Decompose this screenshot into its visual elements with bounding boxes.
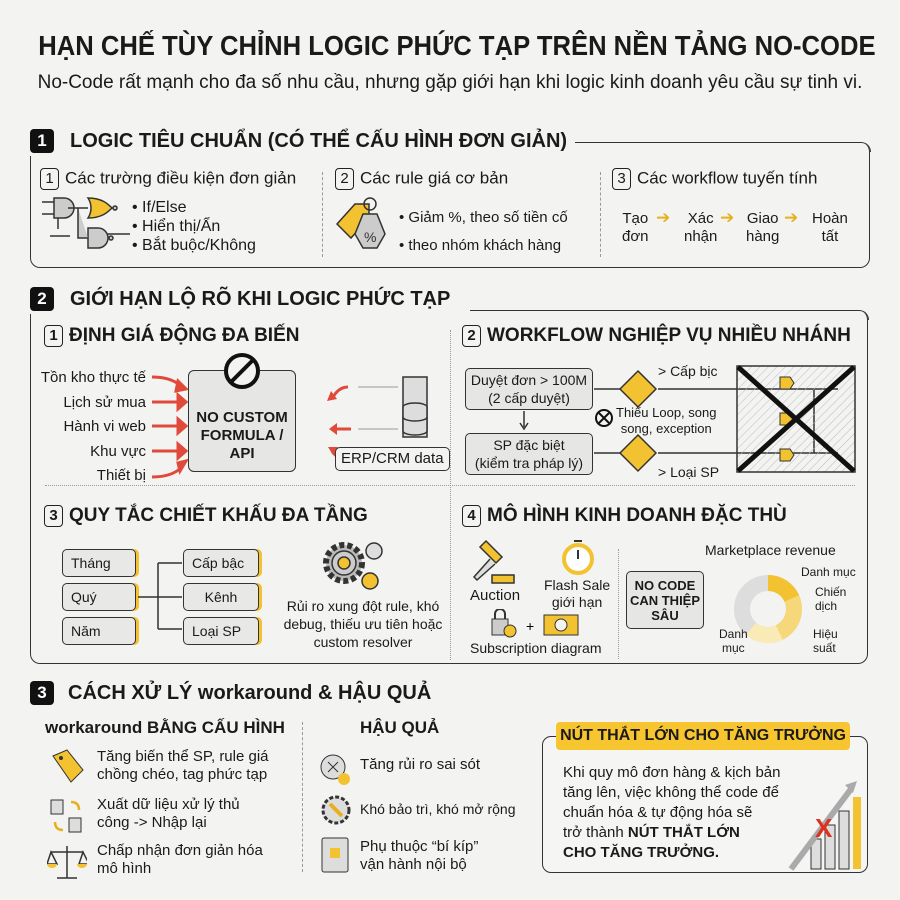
item 3: linear workflows: Xác bbox=[688, 210, 714, 227]
sub-panel: special business models: MÔ HÌNH KINH DOANH ĐẶC THÙ bbox=[487, 505, 787, 526]
item 3: linear workflows: nhận bbox=[684, 228, 717, 245]
sub-panel: special business models: Subscription diagram bbox=[470, 640, 602, 656]
item 3: linear workflows: đơn bbox=[622, 228, 649, 245]
item 1: simple conditions: 1 bbox=[45, 170, 54, 187]
item 2: basic price rules: • Giảm %, theo số tiền cố bbox=[399, 209, 568, 226]
title: HẠN CHẾ TÙY CHỈNH LOGIC PHỨC TẠP TRÊN NỀN TẢNG NO-CODE bbox=[38, 30, 876, 61]
chart: marketplace revenue donut: Marketplace revenue bbox=[705, 542, 836, 558]
icon: price tags: % bbox=[364, 229, 376, 245]
icon: book bbox=[322, 838, 348, 872]
sub-panel: dynamic pricing: Lịch sử mua bbox=[63, 394, 146, 410]
sub-panel: multi-tier discount: Rủi ro xung đột rule, khó debug, thiếu ưu tiên hoặc custom resolver bbox=[284, 598, 442, 650]
callout: growth bottleneck: tăng lên, việc không thể code để bbox=[563, 784, 779, 801]
sub-panel: multi-branch workflow: > Cấp bịc bbox=[658, 363, 718, 379]
column: consequences: vận hành nội bộ bbox=[360, 856, 467, 873]
icon: lock + money bbox=[492, 609, 578, 638]
chart: marketplace revenue donut: Chiến bbox=[815, 585, 846, 599]
chart: marketplace revenue donut: mục bbox=[722, 641, 745, 655]
column: consequences bbox=[320, 718, 515, 873]
subtitle: No-Code rất mạnh cho đa số nhu cầu, nhưng gặp giới hạn khi logic kinh doanh yêu cầu sự tinh vi. bbox=[38, 72, 862, 93]
sub-panel: multi-tier discount: QUY TẮC CHIẾT KHẤU ĐA TẦNG bbox=[69, 505, 368, 526]
column: workaround: mô hình bbox=[97, 860, 151, 877]
sub-panel: dynamic pricing: Khu vực bbox=[90, 442, 146, 460]
item 3: linear workflows: ➔ bbox=[656, 208, 670, 227]
sub-panel: multi-branch workflow: WORKFLOW NGHIỆP VỤ NHIỀU NHÁNH bbox=[487, 325, 851, 346]
icon: gear wrench bbox=[322, 796, 350, 824]
panel: section 2 bbox=[30, 310, 868, 664]
box: no code deep bbox=[626, 571, 704, 629]
column: workaround: workaround BẰNG CẤU HÌNH bbox=[45, 718, 285, 737]
column: consequences: Khó bảo trì, khó mở rộng bbox=[360, 801, 515, 817]
heading: section 3: CÁCH XỬ LÝ workaround & HẬU QUẢ bbox=[68, 682, 431, 704]
column: workaround: Tăng biến thể SP, rule giá bbox=[97, 748, 269, 765]
item 3: linear workflows: tất bbox=[822, 228, 838, 245]
sub-panel: multi-tier discount: 3 bbox=[49, 507, 58, 524]
callout label bbox=[556, 722, 850, 750]
sub-panel: multi-branch workflow bbox=[462, 324, 856, 480]
item 1: simple conditions: Các trường điều kiện đơn giản bbox=[65, 168, 296, 187]
column: consequences: Tăng rủi ro sai sót bbox=[360, 756, 480, 773]
sub-panel: dynamic pricing: 1 bbox=[49, 327, 58, 344]
sub-panel: special business models: giới hạn bbox=[552, 594, 602, 610]
icon: error bbox=[320, 754, 350, 785]
sub-panel: multi-branch workflow: 2 bbox=[467, 327, 476, 344]
item 3: linear workflows: hàng bbox=[746, 228, 779, 245]
sub-panel: special business models: Flash Sale bbox=[544, 577, 610, 593]
sub-panel: dynamic pricing bbox=[41, 323, 450, 484]
sub-panel: multi-branch workflow: > Loại SP bbox=[658, 464, 719, 480]
item 3: linear workflows: Hoàn bbox=[812, 210, 848, 227]
column: workaround: công -> Nhập lại bbox=[97, 814, 207, 831]
item 3: linear workflows: Các workflow tuyến tính bbox=[637, 168, 817, 187]
sub-panel: special business models: 4 bbox=[467, 507, 476, 524]
item 1: simple conditions bbox=[40, 168, 296, 254]
item 3: linear workflows: ➔ bbox=[720, 208, 734, 227]
sub-panel: multi-branch workflow: (kiểm tra pháp lý) bbox=[475, 455, 583, 471]
column: consequences: HẬU QUẢ bbox=[360, 718, 439, 737]
icon: stopwatch bbox=[562, 540, 594, 575]
box: no custom formula bbox=[188, 370, 296, 472]
icon: hands exchange bbox=[50, 800, 82, 832]
chart: marketplace revenue donut: Danh mục bbox=[801, 565, 856, 579]
sub-panel: special business models bbox=[462, 503, 856, 659]
icon: prohibited bbox=[224, 353, 260, 389]
sub-panel: multi-branch workflow: Duyệt đơn > 100M bbox=[471, 372, 587, 388]
sub-panel: multi-branch workflow: song, exception bbox=[621, 421, 712, 436]
box: no code deep: NO CODE CAN THIỆP SÂU bbox=[630, 578, 700, 623]
panel: section 1 bbox=[30, 142, 870, 268]
item 2: basic price rules bbox=[335, 168, 568, 254]
sub-panel: multi-tier discount: Loại SP bbox=[192, 623, 241, 639]
chart: growth bars with X bbox=[788, 781, 861, 871]
item 1: simple conditions: • If/Else bbox=[132, 199, 187, 216]
sub-panel: multi-tier discount: Năm bbox=[71, 623, 101, 639]
label: ERP/CRM data: ERP/CRM data bbox=[341, 450, 444, 467]
item 1: simple conditions: • Hiển thị/Ẩn bbox=[132, 218, 220, 235]
icon: crossed out block bbox=[736, 365, 856, 473]
arrows in bbox=[152, 376, 188, 478]
icon: database bbox=[327, 376, 428, 457]
heading: section 1: 1 bbox=[37, 131, 47, 150]
callout: growth bottleneck: trở thành NÚT THẮT LỚN bbox=[563, 824, 740, 841]
chart: marketplace revenue donut bbox=[705, 542, 856, 655]
item 3: linear workflows: 3 bbox=[617, 170, 626, 187]
box: no custom formula: NO CUSTOM FORMULA / API bbox=[196, 409, 288, 462]
sub-panel: dynamic pricing: Tồn kho thực tế bbox=[41, 369, 146, 386]
icon: lock + money: + bbox=[526, 618, 534, 634]
icon: tag bbox=[52, 749, 84, 783]
callout: growth bottleneck bbox=[542, 736, 868, 873]
callout label: NÚT THẮT LỚN CHO TĂNG TRƯỞNG bbox=[560, 727, 846, 744]
heading: section 3: 3 bbox=[37, 683, 47, 702]
sub-panel: multi-tier discount: Tháng bbox=[71, 555, 111, 571]
heading: section 2: 2 bbox=[37, 289, 47, 308]
item 2: basic price rules: • theo nhóm khách hàng bbox=[399, 237, 561, 254]
chart: marketplace revenue donut: suất bbox=[813, 641, 836, 655]
icon: logic gates bbox=[42, 197, 130, 249]
chart: marketplace revenue donut: dịch bbox=[815, 599, 837, 613]
heading: section 2: GIỚI HẠN LỘ RÕ KHI LOGIC PHỨC TẠP bbox=[70, 288, 450, 310]
sub-panel: dynamic pricing: ĐỊNH GIÁ ĐỘNG ĐA BIẾN bbox=[69, 325, 299, 346]
heading: section 2 bbox=[30, 286, 470, 314]
icon: gears bbox=[323, 542, 383, 590]
sub-panel: multi-tier discount: Kênh bbox=[205, 589, 237, 605]
callout: growth bottleneck: chuẩn hóa & tự động hóa sẽ bbox=[563, 804, 752, 821]
callout: growth bottleneck: CHO TĂNG TRƯỞNG. bbox=[563, 844, 719, 861]
sub-panel: dynamic pricing: Hành vi web bbox=[63, 418, 146, 435]
icon: scales bbox=[47, 846, 87, 879]
sub-panel: multi-branch workflow: Thiếu Loop, song bbox=[616, 405, 716, 420]
item 3: linear workflows: Giao bbox=[747, 210, 779, 227]
heading: section 1: LOGIC TIÊU CHUẨN (CÓ THỂ CẤU HÌNH ĐƠN GIẢN) bbox=[70, 130, 567, 152]
column: workaround: Xuất dữ liệu xử lý thủ bbox=[97, 796, 240, 813]
item 1: simple conditions: • Bắt buộc/Không bbox=[132, 237, 256, 254]
item 2: basic price rules: Các rule giá cơ bản bbox=[360, 168, 508, 187]
item 2: basic price rules: 2 bbox=[340, 170, 349, 187]
icon: gavel bbox=[473, 540, 515, 584]
sub-panel: multi-branch workflow: (2 cấp duyệt) bbox=[488, 390, 570, 406]
icon: price tags bbox=[336, 197, 386, 249]
column: consequences: Phụ thuộc “bí kíp” bbox=[360, 838, 478, 855]
sub-panel: multi-tier discount bbox=[44, 504, 442, 650]
item 3: linear workflows: ➔ bbox=[784, 208, 798, 227]
sub-panel: multi-tier discount: Quý bbox=[71, 589, 97, 605]
label: ERP/CRM data bbox=[335, 447, 450, 471]
column: workaround bbox=[45, 718, 285, 879]
sub-panel: multi-branch workflow: SP đặc biệt bbox=[493, 437, 565, 453]
chart: marketplace revenue donut: Hiệu bbox=[813, 627, 838, 641]
callout: growth bottleneck: Khi quy mô đơn hàng & kịch bản bbox=[563, 764, 780, 781]
item 3: linear workflows bbox=[612, 168, 848, 245]
item 3: linear workflows: Tạo bbox=[622, 210, 648, 227]
column: workaround: Chấp nhận đơn giản hóa bbox=[97, 842, 263, 859]
sub-panel: dynamic pricing: Thiết bị bbox=[97, 467, 146, 484]
chart: marketplace revenue donut: Danh bbox=[719, 627, 748, 641]
chart: growth bars with X: X bbox=[815, 813, 833, 843]
column: workaround: chồng chéo, tag phức tạp bbox=[97, 766, 267, 783]
diagram: branches bbox=[519, 370, 838, 472]
sub-panel: special business models: Auction bbox=[470, 587, 520, 604]
sub-panel: multi-tier discount: Cấp bậc bbox=[192, 555, 244, 571]
